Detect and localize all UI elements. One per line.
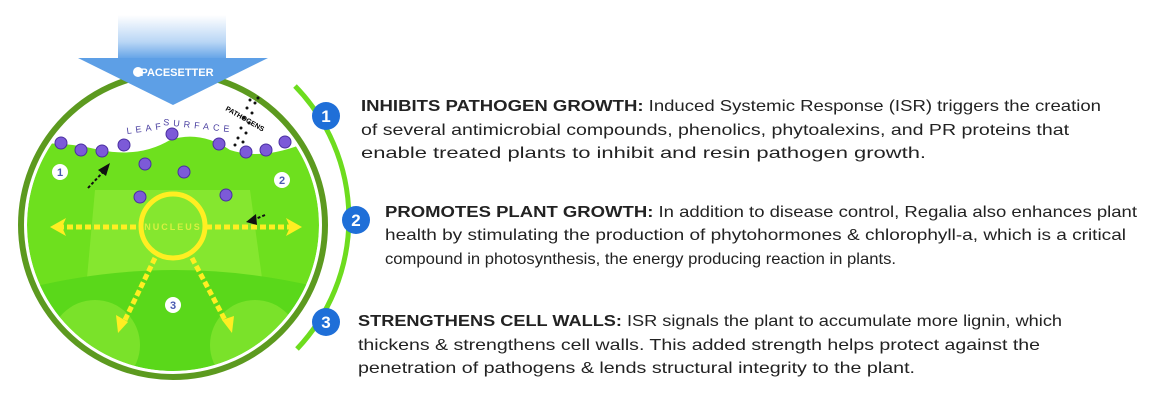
small numbers: 1	[57, 167, 63, 179]
text block 3: penetration of pathogens & lends structural integrity to the plant.	[358, 360, 915, 377]
text block 2: PROMOTES PLANT GROWTH: In addition to disease control, Regalia also enhances plant	[385, 204, 1138, 221]
text block 3: thickens & strengthens cell walls. This added strength helps protect against the	[358, 337, 1040, 354]
text block 1: INHIBITS PATHOGEN GROWTH: Induced Systemic Response (ISR) triggers the creation	[361, 98, 1101, 115]
small numbers	[52, 164, 290, 313]
text block 3: STRENGTHENS CELL WALLS: ISR signals the plant to accumulate more lignin, which	[358, 313, 1062, 330]
cell circle diagram	[20, 73, 330, 390]
text block 1: of several antimicrobial compounds, phenolics, phytoalexins, and PR proteins that	[361, 122, 1070, 139]
nucleus	[141, 194, 205, 258]
small numbers: 3	[170, 300, 176, 312]
text block 1	[361, 98, 1101, 162]
green arc	[295, 86, 349, 349]
badges: 3	[321, 313, 331, 332]
badges	[312, 102, 370, 336]
text block 2: compound in photosynthesis, the energy producing reaction in plants.	[385, 251, 896, 268]
badges: 2	[351, 211, 361, 230]
pathogens: PATHOGENS	[224, 106, 265, 134]
text block 2	[385, 204, 1138, 268]
yellow arrows	[58, 227, 290, 320]
small arrows	[88, 170, 105, 188]
small numbers: 2	[279, 175, 285, 187]
badges: 1	[321, 107, 331, 126]
purple dots	[55, 128, 291, 203]
text block 1: enable treated plants to inhibit and resin pathogen growth.	[361, 145, 926, 162]
text block 2: health by stimulating the production of phytohormones & chlorophyll-a, which is a critical	[385, 227, 1126, 244]
pacesetter arrow	[78, 15, 268, 105]
pacesetter arrow: PACESETTER	[140, 67, 214, 79]
cell circle diagram: SURFACE	[163, 117, 234, 134]
leaf surface label: LEAF	[126, 121, 165, 136]
text block 3	[358, 313, 1062, 377]
pathogens	[224, 96, 265, 146]
nucleus: NUCLEUS	[144, 222, 202, 232]
